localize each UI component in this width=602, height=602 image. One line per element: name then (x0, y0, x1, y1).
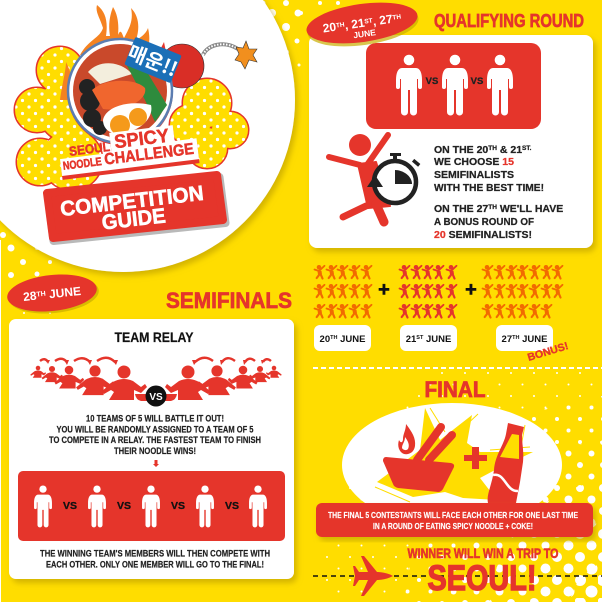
text: winner prize: WINNER WILL WIN A TRIP TO (408, 546, 558, 561)
panel: semifinals (9, 319, 294, 579)
text: winning team (40, 548, 270, 570)
date label: 27th June: 27 (502, 334, 512, 345)
date badge: 20th, 21st, 27th June: , 27 (372, 12, 394, 28)
plus signs: + (465, 279, 477, 301)
versus panel: VS (426, 76, 438, 87)
versus panel (366, 43, 541, 129)
logo text: SEOUL (68, 139, 111, 159)
text: qualifying rules: SEMIFINALISTS (434, 169, 514, 181)
text: qualifying rules: TH (488, 204, 497, 211)
relay team illustration (30, 358, 282, 406)
text: winning team: THE WINNING TEAM'S MEMBERS WILL THEN COMPETE WITH (40, 548, 270, 560)
semifinalist icons: 27th June (482, 265, 562, 318)
date badge: 20th, 21st, 27th June: TH (392, 13, 402, 22)
competition guide banner (47, 175, 226, 241)
logo: Seoul Spicy Noodle Challenge (15, 5, 257, 190)
logo text: CHALLENGE (103, 141, 195, 169)
white oval (342, 403, 562, 527)
noodle bowl (67, 39, 173, 145)
competition guide banner: GUIDE (101, 204, 167, 235)
text: team relay rules (49, 414, 261, 457)
text: qualifying rules: TH (488, 145, 497, 152)
plus signs: + (378, 279, 390, 301)
text: qualifying rules: WE'LL HAVE (497, 203, 563, 215)
versus panel: five members (18, 471, 285, 541)
date badge: 28th June: JUNE (45, 284, 82, 302)
date badge: 20th, 21st, 27th June: 20 (322, 20, 337, 35)
competition guide banner: COMPETITION (59, 182, 205, 221)
panel: qualifying round (309, 35, 593, 248)
date badge: 28th June (5, 270, 101, 318)
bonus label: BONUS! (526, 340, 570, 364)
date badge: 28th June: TH (36, 291, 46, 299)
text: qualifying rules: WITH THE BEST TIME! (434, 182, 544, 194)
date badge: 20th, 21st, 27th June: ST (364, 18, 373, 26)
vs badge (146, 386, 166, 406)
logo text: NOODLE (62, 156, 103, 173)
text: winner prize: SEOUL! (428, 559, 536, 598)
date label: 20th June (314, 325, 371, 351)
semifinalist icons: 20th June (314, 265, 372, 318)
date label: 21st June: 21 (406, 334, 416, 345)
date label: 27th June: JUNE (519, 334, 547, 345)
date label: 21st June: JUNE (423, 334, 451, 345)
semifinalist icons: 21st June (400, 265, 456, 318)
final description banner (316, 503, 593, 537)
date label: 21st June: ST (416, 335, 424, 341)
text: qualifying rules: ON THE 27 (434, 203, 488, 215)
text: qualifying rules: & 21 (497, 144, 522, 156)
date label: 27th June: TH (512, 335, 519, 341)
plus signs (378, 279, 477, 301)
vs badge: VS (149, 392, 163, 403)
arrow down (153, 460, 159, 467)
date badge: 20th, 21st, 27th June: JUNE (353, 27, 377, 40)
final illustration (342, 403, 562, 527)
text: qualifying rules: WE CHOOSE 15 (434, 156, 514, 168)
icon: cola bottle (488, 423, 524, 503)
heading: final: FINAL (424, 377, 486, 402)
date label: 20th June: JUNE (337, 334, 365, 345)
date label: 21st June (400, 325, 457, 351)
halftone dots: bottom right (320, 372, 602, 602)
halftone dots: top and bottom-left (0, 0, 340, 314)
versus panel: five members: VS (171, 500, 185, 512)
versus panel: VS (471, 76, 483, 87)
white circle panel (0, 0, 295, 272)
date label: 27th June (496, 325, 553, 351)
heading: semifinals: SEMIFINALS (166, 288, 292, 313)
icon: noodle bowl (383, 424, 454, 492)
logo text (58, 122, 200, 180)
date badge: 20th, 21st, 27th June (304, 0, 421, 53)
heading: team relay: TEAM RELAY (114, 330, 194, 345)
versus panel: five members: VS (117, 500, 131, 512)
text: qualifying rules: A BONUS ROUND OF (434, 216, 535, 228)
versus panel: five members: VS (225, 500, 239, 512)
logo text: SPICY (113, 126, 171, 153)
bomb (160, 41, 257, 88)
text: qualifying rules: 20 SEMIFINALISTS! (434, 229, 532, 241)
date label: 20th June: 20 (320, 334, 330, 345)
text: winner prize (408, 546, 558, 598)
date label: 20th June: TH (330, 335, 337, 341)
text: qualifying rules: ST. (522, 145, 532, 152)
text: team relay rules: TO COMPETE IN A RELAY. THE FASTEST TEAM TO FINISH (49, 435, 261, 446)
text: team relay rules: 10 TEAMS OF 5 WILL BATTLE IT OUT! (86, 414, 224, 424)
comic cloud (15, 47, 248, 190)
text: qualifying rules: ON THE 20 (434, 144, 488, 156)
final description banner: IN A ROUND OF EATING SPICY NOODLE + COKE! (373, 521, 533, 531)
date badge: 20th, 21st, 27th June: , 21 (344, 16, 366, 32)
versus panel: five members: VS (63, 500, 77, 512)
flames (60, 5, 166, 100)
spicy sign: 매운!! (124, 36, 183, 83)
text: team relay rules: THEIR NOODLE WINS! (114, 446, 196, 457)
plus sign (464, 447, 487, 469)
text: qualifying rules (434, 144, 563, 241)
yellow burst (375, 408, 533, 502)
text: team relay rules: YOU WILL BE RANDOMLY ASSIGNED TO A TEAM OF 5 (56, 424, 254, 436)
text: winning team: EACH OTHER. ONLY ONE MEMBER WILL GO TO THE FINAL! (46, 560, 264, 570)
date badge: 20th, 21st, 27th June: TH (336, 21, 345, 30)
icon: runner and stopwatch (329, 134, 420, 222)
left edge strip (0, 240, 1, 602)
icon: airplane (353, 556, 393, 596)
date badge: 28th June: 28 (23, 289, 37, 304)
